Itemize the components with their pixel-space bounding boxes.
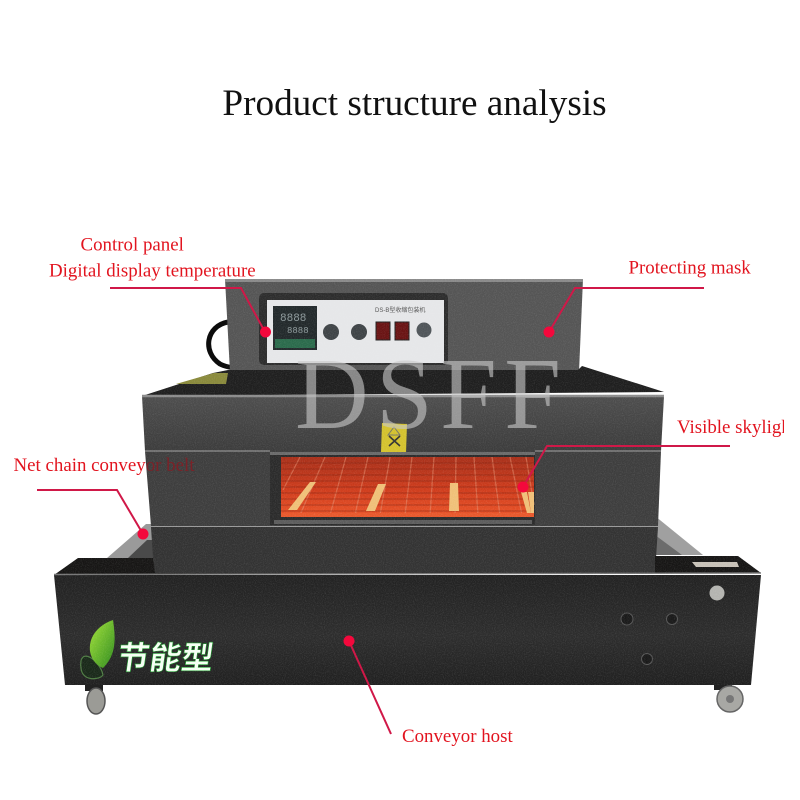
title: Product structure analysis [222,83,607,124]
knob middle [351,324,367,340]
heat tunnel lower front [151,527,658,573]
callout: protecting mask [544,258,751,338]
digital display temperature controller: 8888 [287,326,309,336]
name plate [692,562,739,567]
control panel recess [259,293,448,365]
control panel plate [267,300,444,363]
callout: net chain conveyor belt [14,455,195,540]
leader line [349,641,391,734]
watermark: DSFF [295,338,561,451]
leader line [110,288,265,332]
label: Net chain conveyor belt [14,455,195,476]
marker dot [544,326,554,338]
conveyor host top face [54,556,761,575]
leader line [523,446,730,487]
energy saving logo [81,620,217,679]
screws and bolt [621,586,724,664]
leader line [549,288,704,332]
digital display temperature controller: 8888 [280,313,306,325]
conveyor host front [54,575,761,685]
icon: green leaf [81,620,115,679]
mesh [283,457,534,515]
switch left [376,322,390,340]
warning sticker [381,423,407,453]
logo text: 节能型 [115,633,217,679]
digital display temperature controller [273,306,317,350]
heater strips [288,482,534,513]
plate heading: DS-B型收缩包装机 [375,306,425,314]
knob right [416,322,432,338]
visible skylight window [270,452,535,525]
callout: control panel, digital display temperature [49,234,271,338]
caster wheel left [85,685,105,714]
label: Conveyor host [402,726,513,747]
switch right [395,322,409,340]
heat tunnel top face [142,366,664,396]
marker dot [518,482,528,492]
label: control panel: Control panel [80,234,184,256]
yellow patch on top face [176,373,228,384]
marker dot [344,636,354,646]
label: Protecting mask [628,258,751,278]
grain texture [40,270,770,700]
heat tunnel middle front [145,451,661,526]
leader line [37,490,143,534]
knob left [323,324,339,340]
marker dot [138,528,148,540]
label: digital display temperature: Digital display temperature [49,260,256,282]
heat tunnel upper front [142,396,664,451]
power cable [209,322,590,372]
net chain conveyor belt: right end [655,516,703,555]
marker dot [260,326,271,338]
machine: shrink packaging machine [40,270,770,714]
callout: visible skylight [518,417,797,492]
net chain conveyor belt: left end [107,524,156,560]
callout: conveyor host [344,636,513,747]
caster wheel right [714,684,743,712]
protecting mask [225,279,583,372]
